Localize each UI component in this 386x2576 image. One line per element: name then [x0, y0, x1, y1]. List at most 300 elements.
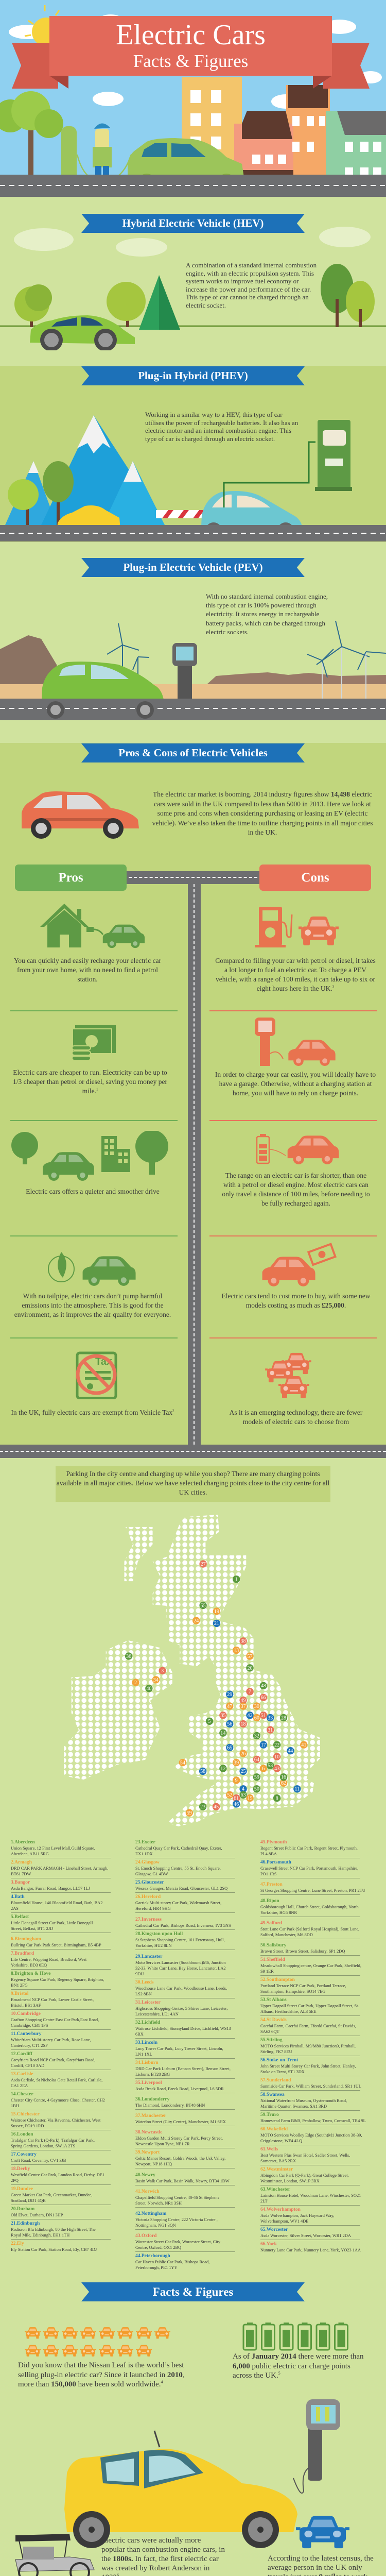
charging point list: column 1: 12.Cardiff: [11, 2052, 32, 2057]
charging point list: column 3: 62.Westminster: [260, 2167, 293, 2172]
charging point list: column 2: 27.Inverness: [135, 1917, 162, 1922]
charging point list: column 3: 50.Salisbury: [260, 1943, 286, 1948]
UK dot map with numbered charging points: 19: [214, 1609, 219, 1615]
heading: HEV: [81, 214, 305, 233]
UK dot map with numbered charging points: 60: [254, 1715, 259, 1721]
charging point list: column 1: Bristol, BS1 3AF: [11, 2003, 41, 2008]
charging point list: column 3: Caerfai Farm, Caerfai Farm, Ffordd Caerfai, St Davids,: [260, 2024, 356, 2028]
map intro box: Parking In the city centre and charging up while you shop? There are many charging points available in all major cities. Below we have selected charging points close to the city centre for all UK cities.: [57, 1470, 329, 1496]
charging point list: column 3: 66.York: [260, 2242, 277, 2247]
charging point list: column 1: Westfield Centre Car Park, London Road, Derby, DE1: [11, 2173, 104, 2177]
heading: HEV: Hybrid Electric Vehicle (HEV): [122, 217, 264, 229]
UK dot map with numbered charging points: 46: [234, 1802, 239, 1807]
UK dot map with numbered charging points: 16: [281, 1775, 286, 1781]
charging point list: column 3: Somerset, BA5 2RX: [260, 2159, 296, 2163]
pro 1 text: You can quickly and easily recharge your electric car from your own home, with no need to find a petrol station.: [14, 957, 161, 983]
UK dot map with numbered charging points: 5: [208, 1719, 211, 1724]
charging point list: column 1: 14.Chester: [11, 2092, 33, 2097]
charging point list: column 2: Celtic Manor Resort, Coldra Woods, the Usk Valley,: [135, 2156, 225, 2161]
UK dot map with numbered charging points: 50: [254, 1787, 259, 1792]
charging point list: column 3: 53.St Albans: [260, 1997, 287, 2003]
charging point list: column 3: Upper Dagnall Street Car Park, Upper Dagnall Street, St.: [260, 2004, 359, 2008]
charging point list: column 3: 48.Ripon: [260, 1899, 279, 1904]
UK dot map with numbered charging points: 58: [200, 1769, 205, 1774]
charging point list: column 2: Asda Breck Road, Breck Road, Liverpool, L6 5DR: [135, 2087, 224, 2091]
UK dot map with numbered charging points: 10: [274, 1754, 279, 1760]
charging point list: column 2: 41.Norwich: [135, 2189, 160, 2194]
con 2 icon: charger and car: [255, 1018, 336, 1066]
charging point list: column 3: Asda Worcester, Silver Street, Worcester, WR1 2DA: [260, 2233, 351, 2238]
charging point list: column 3: 59.Truro: [260, 2112, 279, 2117]
charging point list: column 2: 23.Exeter: [135, 1840, 155, 1845]
charging point list: column 3: 65.Worcester: [260, 2227, 288, 2232]
charging point list: column 3: 2LT: [260, 2199, 268, 2204]
charging point list: column 1: Cambridge, CB1 1PS: [11, 2023, 48, 2028]
charging point list: column 2: Wessex Garages, Mercia Road, Gloucester, GL1 2SQ: [135, 1886, 227, 1891]
pro 3 text: Electric cars offers a quieter and smoother drive: [26, 1188, 160, 1195]
charging point list: column 3: 47.Preston: [260, 1882, 283, 1887]
charging point list: column 1: Green Market Car Park, Greenmarket, Dundee,: [11, 2193, 93, 2197]
UK dot map with numbered charging points: 65: [227, 1745, 232, 1751]
charging point list: column 1: Scotland, DD1 4QB: [11, 2198, 46, 2203]
charging point list: column 2: 44.Peterborough: [135, 2253, 170, 2259]
charging point list: column 3: Nunnery Lane Car Park, Nunnery Lane, York, YO23 1AA: [260, 2248, 361, 2252]
charging point list: column 2: 43.Oxford: [135, 2233, 156, 2239]
charging point list: column 2: Basin Walk Car Park, Basin Walk, Newry, BT34 1DW: [135, 2179, 230, 2183]
charging point list: column 1: Croft Road, Coventry, CV1 3JB: [11, 2158, 66, 2163]
con 4 text: Electric cars tend to cost more to buy, with some new models costing as much as £25,000.: [222, 1292, 370, 1309]
UK dot map with numbered charging points: 3: [161, 1668, 164, 1674]
UK dot map with numbered charging points: 2: [134, 1680, 137, 1686]
UK dot map with numbered charging points: 66: [261, 1695, 266, 1701]
charging point list: column 3: 61.Wells: [260, 2147, 278, 2152]
charging point list: column 2: 37.Manchester: [135, 2113, 166, 2119]
charging point list: column 2: Waitrose Lichfield, Stonnyland Drive, Lichfield, WS13: [135, 2026, 231, 2031]
UK dot map with numbered charging points: 47: [227, 1704, 232, 1709]
UK dot map with numbered charging points: 28: [281, 1715, 286, 1721]
UK dot map with numbered charging points: 51: [261, 1713, 266, 1719]
heading: PHEV: [81, 366, 305, 385]
charging point list: column 2: Peterborough, PE1 1YY: [135, 2265, 178, 2270]
charging point list: column 2: EX1 1DX: [135, 1852, 153, 1856]
charging point list: column 2: Newcastle Upon Tyne, NE1 7R: [135, 2142, 190, 2146]
charging point list: column 1: DRD CAR PARK ARMAGH - Linehall Street, Armagh,: [11, 1866, 108, 1871]
charging point list: column 3: Crigglestone, WF4 4LQ: [260, 2139, 302, 2143]
charging point list: column 3: Stott Lane Car Park (Salford Royal Hospital), Stott Lane,: [260, 1927, 359, 1931]
heading: Facts & Figures: [81, 2282, 305, 2301]
charging point list: column 1: 8.Brighton & Hove: [11, 1971, 50, 1976]
pro 5 icon: vehicle tax crossed out: [76, 1352, 117, 1399]
charging point list: column 1: CA1 2EA: [11, 2083, 28, 2088]
pro 2 text: Electric cars are cheaper to run. Electricity can be up to 1/3 cheaper than petrol or diesel, saving you money per mile.1: [13, 1069, 167, 1095]
UK dot map with numbered charging points: 55: [201, 1603, 206, 1608]
charge points fact: As of January 2014 there were more than 6,000 public electric car charge points across the UK.5: [233, 2352, 364, 2380]
illustration: yellow car charging: [64, 2399, 340, 2548]
charging point list: column 2: [135, 1840, 235, 2270]
charging point list: column 2: 42.Nottingham: [135, 2211, 166, 2216]
UK dot map with numbered charging points: 26: [241, 1751, 246, 1757]
charging point list: column 3: Maritime Quarter, Swansea, SA1 3RD: [260, 2104, 327, 2109]
UK dot map with numbered charging points: 59: [187, 1810, 192, 1816]
charging point list: column 3: Best Western Plus Swan Hotel, Sadler Street, Wells,: [260, 2153, 350, 2158]
charging point list: column 1: 2.Armagh: [11, 1860, 32, 1865]
UK dot map with numbered charging points: 43: [274, 1766, 279, 1772]
charging point list: column 1: 1.Aberdeen: [11, 1840, 35, 1845]
charging point list: column 3: 55.Stirling: [260, 2038, 282, 2043]
UK dot map with numbered charging points: 49: [241, 1698, 246, 1703]
charging point list: column 3: 46.Portsmouth: [260, 1860, 291, 1865]
charging point list: column 1: Life Centre, Wapping Road, Bradford, West: [11, 1957, 86, 1962]
charging point list: column 3: Salford, Manchester, M6 8DD: [260, 1933, 313, 1937]
charging point list: column 1: Regency Square Car Park, Regency Square, Brighton,: [11, 1977, 104, 1982]
con 2 text: In order to charge your car easily, you will ideally have to have a garage. Otherwise, without a charging station at home, you will have to rely on charge points.: [215, 1071, 376, 1097]
UK dot map with numbered charging points: 12: [220, 1766, 225, 1772]
charging point list: column 1: Asda Bangor, Farrar Road, Bangor, LL57 1LJ: [11, 1886, 90, 1891]
charging point list: column 2: 6RX: [135, 2032, 144, 2037]
heading: PHEV: Plug-in Hybrid (PHEV): [138, 369, 248, 382]
charging point list: column 2: 40.Newry: [135, 2173, 155, 2178]
UK dot map with numbered charging points: 30: [254, 1704, 259, 1709]
UK dot map with numbered charging points: 59: [254, 1775, 259, 1781]
charging point list: column 3: 56.Stoke-on-Trent: [260, 2058, 298, 2063]
charging point list: column 1: Aberdeen, AB11 5RG: [11, 1852, 49, 1856]
icon: blue car front: [296, 2516, 349, 2548]
charging point list: column 3: Stirling, FK7 8EU: [260, 2049, 292, 2054]
HEV illustration: trees and green car: [0, 227, 386, 350]
charging point list: column 3: Portland Terrace NCP Car Park, Portland Terrace,: [260, 1984, 346, 1988]
charging point list: column 2: St Stephens Shopping Centre, 101 Ferensway, Hull,: [135, 1938, 225, 1942]
UK dot map with numbered charging points: 33: [268, 1715, 273, 1721]
UK dot map with numbered charging points: 37: [241, 1704, 246, 1709]
pro 4 text: With no tailpipe, electric cars don’t pump harmful emissions into the atmosphere. This is good for the environment, as it improves the air quality for everyone.: [14, 1292, 171, 1318]
charging point list: column 3: Yorkshire, HG5 8NR: [260, 1910, 297, 1915]
charging point list: column 2: Garrick Multi-storey Car Park, Widemarsh Street,: [135, 1901, 221, 1905]
charging point list: column 2: LS2 8BN: [135, 1992, 152, 1996]
charging point list: column 1: Old Elvet, Durham, DN1 3HP: [11, 2213, 63, 2217]
UK dot map with numbered charging points: 44: [288, 1749, 293, 1754]
UK dot map with numbered charging points: 48: [261, 1683, 266, 1689]
charging point list: column 1: 13.Carlisle: [11, 2072, 33, 2077]
UK dot map with numbered charging points: 40: [146, 1686, 151, 1692]
charging point list: column 2: 24.Glasgow: [135, 1860, 160, 1865]
charging point list: column 3: Crasswell Street NCP Car Park, Portsmouth, Hampshire,: [260, 1866, 358, 1871]
charging point list: column 3: 64.Wolverhampton: [260, 2207, 301, 2212]
UK dot map with numbered charging points: 39: [234, 1760, 239, 1766]
UK dot map with numbered charging points: 45: [214, 1804, 219, 1810]
charging point list: column 3: Westminster, London, SW1P 3RX: [260, 2179, 320, 2183]
road connecting pros and cons: [0, 871, 386, 1458]
charging point list: column 2: 38.Newcastle: [135, 2130, 163, 2135]
charging point list: column 2: Glasgow, G1 4BW: [135, 1872, 168, 1876]
charging point list: column 1: Spring Gardens, London, SW1A 2TS: [11, 2144, 75, 2148]
charging point list: column 2: 30.Leeds: [135, 1980, 154, 1985]
charging point list: column 1: Radisson Blu Edinburgh, 80 the High Street, The: [11, 2227, 96, 2232]
charging point list: column 3: SA62 6QT: [260, 2029, 279, 2034]
PHEV illustration: mountains, cars, charging pump: [0, 415, 386, 541]
charging point list: column 1: 17.Coventry: [11, 2152, 37, 2157]
charging point list: column 1: Little Donegall Street Car Park, Little Donegall: [11, 1921, 93, 1925]
charging point list: column 3: S9 1ER: [260, 1969, 274, 1974]
charging point list: column 1: 20.Durham: [11, 2207, 34, 2212]
charging point list: column 2: Car Haven Public Car Park, Bishops Road,: [135, 2260, 209, 2264]
header: Pros: Pros: [58, 871, 83, 885]
charging point list: column 1: 2PQ: [11, 2178, 19, 2183]
UK dot map with numbered charging points: 64: [254, 1757, 259, 1762]
charging point list: column 1: Canterbury, CT1 2SF: [11, 2043, 48, 2048]
charging point list: column 3: 49.Salford: [260, 1921, 282, 1926]
charging point list: column 3: 51.Sheffield: [260, 1957, 285, 1962]
charging point list: column 1: Sussex, PO19 1RD: [11, 2124, 44, 2128]
UK dot map with numbered charging points: 56: [227, 1721, 232, 1727]
pro 2 icon: money: [73, 1025, 116, 1060]
charging point list: column 3: St Georges Shopping Centre, Lune Street, Preston, PR1 2TU: [260, 1888, 365, 1893]
charging point list: column 2: 33.Lincoln: [135, 2040, 157, 2045]
charging point list: column 2: Woodhouse Lane Car Park, Woodhouse Lane, Leeds,: [135, 1986, 227, 1991]
con 5 text: As it is an emerging technology, there are fewer models of electric cars to choose from: [230, 1409, 362, 1426]
charging point list: column 2: St. Enoch Shopping Centre, 55 St. Enoch Square,: [135, 1866, 221, 1871]
charging point list: column 3: Homestead Farm B&B, Penhallow, Truro, Cornwall, TR4 9L: [260, 2119, 366, 2123]
charging point list: column 2: DRD Car Park Lisburn (Benson Street), Benson Street,: [135, 2066, 231, 2071]
UK dot map with numbered charging points: 27: [201, 1562, 206, 1567]
charging point list: column 1: Yorkshire, BD3 0EQ: [11, 1963, 47, 1968]
header illustration: town street scene: [0, 5, 386, 197]
pro 5 text: In the UK, fully electric cars are exempt from Vehicle Tax2: [11, 1409, 174, 1416]
charging point list: column 3: PO1 1RS: [260, 1872, 276, 1876]
charging point list: column 2: The Diamond, Londonderry, BT48 6HN: [135, 2103, 205, 2108]
icon: vintage electric car: [15, 2534, 95, 2576]
UK dot map with numbered charging points: 7: [249, 1689, 251, 1695]
charging point list: column 1: 22.Ely: [11, 2241, 24, 2246]
UK dot map with numbered charging points: 62: [281, 1781, 286, 1786]
charging point list: column 3: MOTO Services Woolley Edge (South)M1 Junction 38-39,: [260, 2133, 362, 2138]
heading: Pros & Cons: Pros & Cons of Electric Vehicles: [118, 747, 268, 759]
charging point list: column 2: Highcross Shopping Centre, 5 Shires Lane, Leicester,: [135, 2006, 227, 2011]
pro 5 icon: vehicle tax crossed out: Tax: [95, 1356, 112, 1367]
con 3 text: The range on an electric car is far shorter, than one with a petrol or diesel engine. Most electric cars can only travel a distance of 100 miles, before needing to be fully recharged again.: [222, 1172, 370, 1207]
charging point list: column 1: 2AS: [11, 1906, 19, 1911]
UK dot map with numbered charging points: 38: [241, 1639, 246, 1645]
header: Cons: [259, 865, 371, 891]
heading: Pros & Cons: [81, 743, 305, 762]
charging point list: column 1: Ely Station Car Park, Station Road, Ely, CB7 4DJ: [11, 2247, 97, 2252]
UK dot map with numbered charging points: 17: [261, 1742, 266, 1748]
charging point list: column 1: 11.Canterbury: [11, 2031, 41, 2037]
charging point list: column 3: Lainston House Hotel, Woodman Lane, Winchester, SO21: [260, 2193, 361, 2198]
charging point list: column 2: 31.Leicester: [135, 2000, 161, 2005]
charging point list: column 2: 29.Lancaster: [135, 1954, 163, 1959]
charging point list: column 2: 32.Lichfield: [135, 2020, 160, 2025]
header: Pros: [15, 865, 127, 891]
charging point list: column 2: Waterloo Street (City Centre), Manchester, M1 6HX: [135, 2120, 226, 2124]
pro 3 icon: trees, car and building: [11, 1131, 168, 1181]
charging point list: column 1: 5.Belfast: [11, 1914, 29, 1920]
UK dot map with numbered charging points: 1: [235, 1577, 238, 1583]
charging point list: column 1: Bullring Car Park Park Street, Birmingham, B5 4BP: [11, 1943, 101, 1947]
charging point list: column 2: Newport, NP18 1HQ: [135, 2162, 172, 2166]
charging point list: column 3: John Street Multi Storey Car Park, John Street, Hanley,: [260, 2064, 356, 2069]
charging point list: column 2: Chapelfield Shopping Centre, 40-46 St Stephens: [135, 2195, 219, 2200]
PEV illustration: windmills, car and charger: [0, 620, 386, 720]
UK dot map with numbered charging points: 32: [254, 1733, 259, 1739]
charging point list: column 2: Street, Norwich, NR1 3SH: [135, 2201, 182, 2206]
charging point list: column 2: Nottingham, NG1 3QN: [135, 2223, 176, 2228]
charging point list: column 1: Whitefriars Multi-storey Car Park, Rose Lane,: [11, 2038, 91, 2042]
PHEV description: Working in a similar way to a HEV, this type of car utilises the power of rechargeable batteries. It also has an electric motor and an internal combustion engine. This type of car is charged through an electric socket.: [145, 411, 298, 442]
charging point list: column 3: MOTO Services Pirnhall, M9/M80 Junction9, Pirnhall,: [260, 2044, 356, 2048]
UK dot map with numbered charging points: [64, 1515, 320, 1826]
UK dot map with numbered charging points: 53: [268, 1763, 273, 1769]
heading: PEV: Plug-in Electric Vehicle (PEV): [123, 561, 263, 573]
charging point list: column 1: 15.Chichester: [11, 2112, 40, 2117]
con 1 icon: fuel pump and car: [255, 907, 339, 947]
charging point list: column 3: 58.Swansea: [260, 2092, 285, 2097]
charging point list: column 1: Chester City Centre, 4 Gaymoore Close, Chester, CH2: [11, 2098, 105, 2103]
charging point list: column 1: 7.Bradford: [11, 1951, 34, 1956]
charging point list: column 3: Brown Street, Brown Street, Salisbury, SP1 2DQ: [260, 1949, 345, 1954]
UK dot map with numbered charging points: 8: [276, 1795, 278, 1801]
charging point list: column 3: Asda Wolverhampton, Jack Hayward Way,: [260, 2213, 334, 2218]
UK dot map with numbered charging points: 20: [247, 1666, 253, 1671]
charging point list: column 3: Wolverhampton, WV1 4DE: [260, 2219, 308, 2224]
charging point list: column 2: 26.Hereford: [135, 1894, 161, 1900]
charging point list: column 1: Street, Belfast, BT1 2JD: [11, 1926, 53, 1931]
charging point list: column 2: 25.Gloucester: [135, 1880, 164, 1885]
charging point list: column 3: 54.St Davids: [260, 2018, 287, 2023]
UK dot map with numbered charging points: 41: [301, 1742, 306, 1748]
charging point list: column 2: Hereford, HR4 9HG: [135, 1906, 171, 1911]
charging point list: column 2: 36.Londonderry: [135, 2097, 169, 2102]
UK dot map with numbered charging points: 34: [153, 1677, 159, 1683]
UK dot map with numbered charging points: 11: [294, 1787, 300, 1792]
charging point list: column 2: 35.Liverpool: [135, 2080, 162, 2086]
UK dot map with numbered charging points: 22: [274, 1742, 279, 1748]
charging point list: column 3: 60.Wakefield: [260, 2127, 288, 2132]
UK dot map with numbered charging points: 35: [220, 1713, 225, 1719]
charging point list: column 3: 57.Sunderland: [260, 2078, 291, 2083]
charging point list: column 3: Sunniside Car Park, William Street, Sunderland, SR1 1UL: [260, 2084, 361, 2089]
charging point list: column 1: 6.Birmingham: [11, 1937, 41, 1942]
charging point list: column 1: Trafalgar Car Park (Q-Park), Trafalgar Car Park,: [11, 2138, 95, 2143]
charging point list: column 2: Moto Services Lancaster (Southbound)M6, Junction: [135, 1960, 226, 1965]
charging point list: column 2: 9DU: [135, 1972, 144, 1976]
charging point list: column 1: Bloomfield House, 146 Bloomfield Road, Bath, BA2: [11, 1901, 102, 1905]
charging point list: column 1: 19.Dundee: [11, 2187, 33, 2192]
charging point list: column 1: 16.London: [11, 2132, 33, 2137]
charging point list: column 1: Cardiff, CF10 3AD: [11, 2063, 44, 2068]
charging point list: column 3: Stoke on Trent, ST1 3DX: [260, 2070, 305, 2074]
charging point list: column 3: Abingdon Car Park (Q-Park), Great College Street,: [260, 2173, 349, 2178]
charging point list: column 3: Meadowhall Shopping centre, Orange Car Park, Sheffield,: [260, 1963, 361, 1968]
charging point list: column 1: Grafton Shopping Centre East Car Park,East Road,: [11, 2018, 99, 2022]
icon: orange hatchback car: [22, 791, 139, 839]
charging point list: column 2: 32-33, White Carr Lane, Bay Horse, Lancaster, LA2: [135, 1966, 226, 1971]
charging point list: column 1: 18.Derby: [11, 2166, 30, 2172]
charging point list: column 1: 9.Bristol: [11, 1991, 29, 1996]
UK dot map with numbered charging points: 9: [235, 1778, 238, 1784]
UK dot map with numbered charging points: 52: [227, 1792, 232, 1798]
UK dot map with numbered charging points: 23: [200, 1804, 205, 1810]
charging point list: column 2: LN1 1XL: [135, 2052, 152, 2057]
charging point list: column 2: 39.Newport: [135, 2150, 160, 2155]
title text: Electric Cars: [116, 19, 266, 51]
UK dot map with numbered charging points: 63: [241, 1792, 246, 1798]
charging point list: column 1: 21.Edinburgh: [11, 2221, 40, 2226]
charging point list: column 3: National Waterfront Museum, Oystermouth Road,: [260, 2098, 347, 2103]
charging point list: column 3: [260, 1840, 366, 2252]
con 3 icon: battery and car: [256, 1134, 339, 1164]
charging point list: column 1: BN1 2FG: [11, 1983, 28, 1988]
charging point list: column 3: 52.Southampton: [260, 1977, 295, 1982]
UK dot map with numbered charging points: 54: [180, 1760, 185, 1766]
Nissan Leaf fact: Did you know that the Nissan Leaf is the world’s best selling plug-in electric car? Since it launched in 2010, more than 150,000 have been sold worldwide.4: [18, 2361, 185, 2388]
UK dot map with numbered charging points: 14: [220, 1731, 225, 1736]
charging point list: column 1: 1BH: [11, 2104, 19, 2108]
UK dot map with numbered charging points: 21: [214, 1621, 219, 1626]
UK dot map with numbered charging points: 25: [241, 1769, 246, 1774]
charging point list: column 2: 28.Kingston upon Hull: [135, 1931, 183, 1937]
charging point list: column 1: Asda Carlisle, St Nicholas Gate Retail Park, Carlisle,: [11, 2078, 102, 2082]
charging point list: column 2: Leicestershire, LE1 4AN: [135, 2012, 179, 2016]
charging point list: column 2: Centre, Oxford, OX1 2BQ: [135, 2245, 181, 2250]
charging point list: column 2: Cathedral Car Park, Bishops Road, Inverness, IV3 5NS: [135, 1923, 231, 1928]
charging point list: column 3: Albans, Hertfordshire, AL3 5EE: [260, 2009, 317, 2014]
title ribbon: [12, 16, 370, 89]
UK dot map with numbered charging points: 13: [234, 1648, 239, 1653]
charging point list: column 3: 45.Plymouth: [260, 1840, 287, 1845]
UK dot map with numbered charging points: 31: [268, 1727, 273, 1733]
UK dot map with numbered charging points: 29: [227, 1692, 232, 1698]
charging point list: column 3: 63.Winchester: [260, 2187, 290, 2192]
heading: PEV: [81, 558, 305, 577]
charging point list: column 2: Yorkshire, HU2 8LN: [135, 1943, 172, 1948]
charging point list: column 2: Worcester Street Car Park, Worcester Street, City: [135, 2240, 220, 2244]
con 1 text: Compared to filling your car with petrol or diesel, it takes a lot longer to fuel an electric car. To charge a PEV vehicle, with a range of 100 miles, it can take up to six or eight hours here in the UK.3: [215, 957, 376, 992]
charging point list: column 1: BT61 7DW: [11, 1872, 31, 1876]
icon grid: batteries: [243, 2323, 348, 2350]
charging point list: column 2: Lucy Tower Car Park, Lucy Tower Street, Lincoln,: [135, 2046, 223, 2051]
intro text: The electric car market is booming. 2014 industry figures show 14,498 electric cars were sold in the UK compared to less than 5000 in 2013. Here we look at some pros and cons when considering purchasing or leasing an EV (electric vehicle). We’ve also taken the time to outline charging points in all major cities in the UK.: [152, 790, 373, 836]
con 5 icon: several cars: [265, 1353, 311, 1398]
charging point list: column 3: Goldsborough Hall, Church Street, Goldsborough, North: [260, 1905, 359, 1909]
pro 1 icon: house with plug and car: [40, 904, 145, 948]
subtitle text: Facts & Figures: [133, 51, 248, 71]
con 4 icon: car and money: [262, 1243, 337, 1286]
charging point list: column 2: Lisburn, BT28 2BG: [135, 2072, 170, 2077]
pro 4 icon: leaf and car: [48, 1252, 136, 1286]
UK dot map with numbered charging points: 61: [234, 1795, 239, 1801]
UK dot map with numbered charging points: 15: [247, 1795, 253, 1801]
UK dot map with numbered charging points: 57: [247, 1654, 253, 1659]
header: Cons: Cons: [301, 871, 329, 885]
charging point list: column 1: 4.Bath: [11, 1894, 25, 1900]
UK dot map with numbered charging points: 36: [126, 1654, 131, 1659]
HEV description: A combination of a standard internal combustion engine, with an electric propulsion system. This system works to improve fuel economy or increase the power and performance of the car. This type of car cannot be charged through an electric socket.: [186, 261, 317, 309]
charging point list: column 3: Regent Street Public Car Park, Regent Street, Plymouth,: [260, 1846, 358, 1851]
charging point list: column 1: Union Square, 12 First Level Mall,Guild Square,: [11, 1846, 95, 1851]
charging point list: column 1: Waitrose Chichester, Via Ravenna, Chichester, West: [11, 2118, 100, 2123]
charging point list: column 3: Southampton, Hampshire, SO14 7EG: [260, 1989, 325, 1994]
charging point list: column 2: 34.Lisburn: [135, 2060, 159, 2065]
charging point list: column 2: Cathedral Quay Car Park, Cathedral Quay, Exeter,: [135, 1846, 222, 1851]
charging point list: column 1: [11, 1840, 111, 2252]
charging point list: column 1: Royal Mile, Edinburgh, EH1 1TH: [11, 2233, 69, 2238]
PEV description: With no standard internal combustion engine, this type of car is 100% powered through electricity. It stores energy in rechargeable battery packs, which can be charged through electric sockets.: [206, 592, 328, 636]
charging point list: column 2: Victoria Shopping Centre, 222 Victoria Centre ,: [135, 2217, 218, 2222]
charging point list: column 1: Broadmead NCP Car Park, Lower Castle Street,: [11, 1997, 94, 2002]
charging point list: column 1: 10.Cambridge: [11, 2011, 41, 2016]
UK dot map with numbered charging points: 24: [194, 1618, 199, 1624]
charging point list: column 2: Eldon Garden Multi Storey Car Park, Percy Street,: [135, 2136, 223, 2141]
